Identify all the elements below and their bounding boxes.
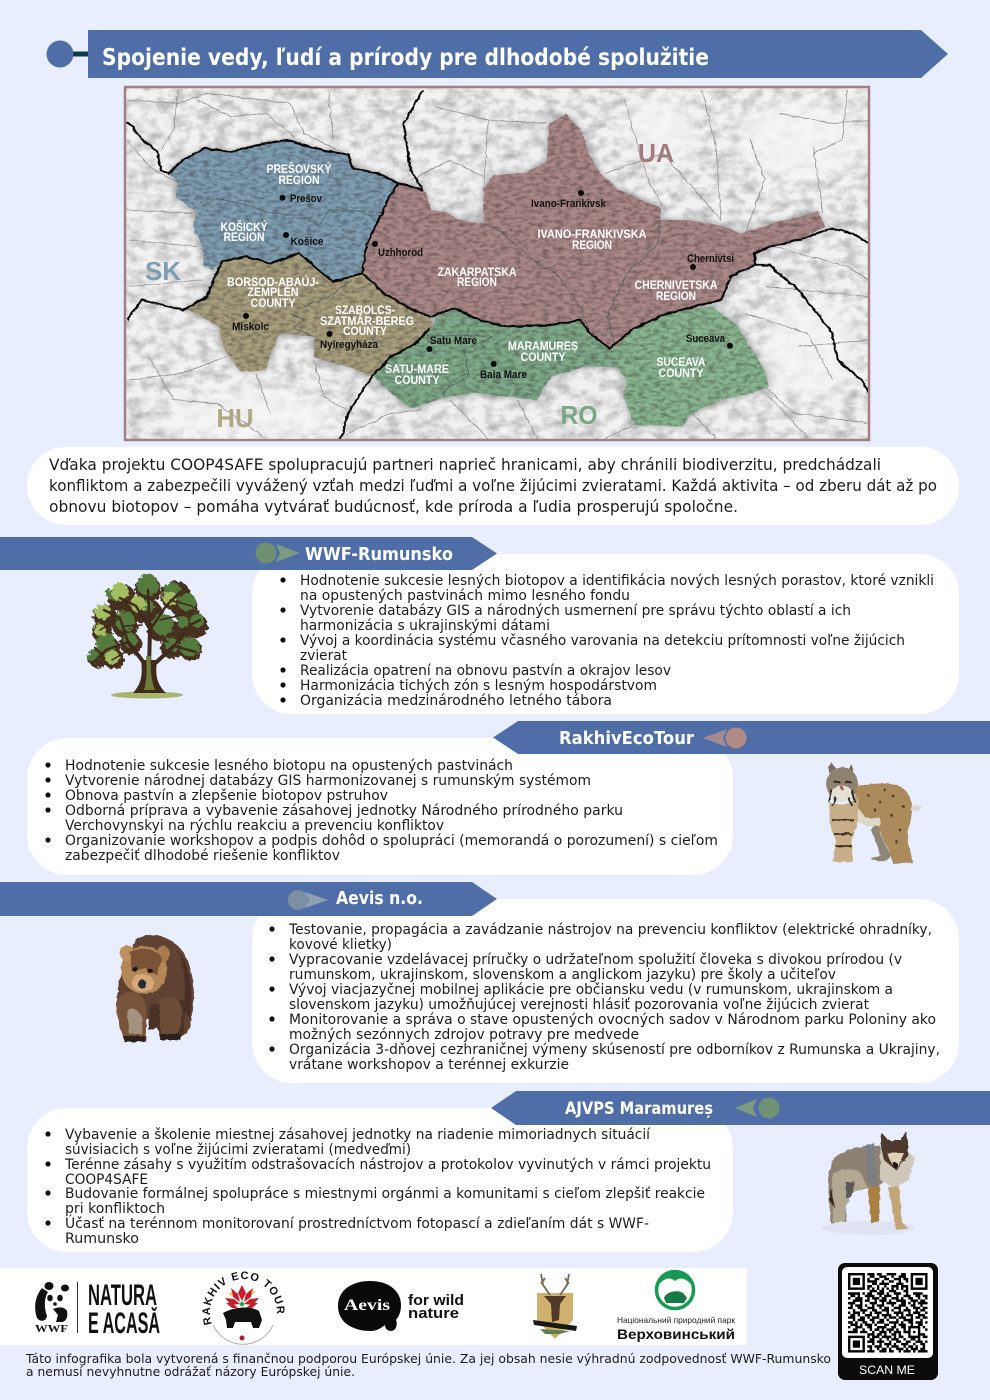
panel: AJVPS Maramureș activities (27, 1108, 733, 1252)
region labels (220, 163, 718, 387)
cities: Ivano-Frankivsk (531, 198, 607, 210)
cities: Baia Mare (480, 369, 527, 381)
icon: wolf (822, 1131, 915, 1235)
heading: WWF-Rumunsko (0, 537, 497, 570)
region labels: COUNTY (250, 298, 296, 310)
QR code with scan me label: SCAN ME (859, 1363, 915, 1377)
heading: AJVPS Maramureș: AJVPS Maramureș (565, 1099, 713, 1119)
footer disclaimer (25, 1351, 831, 1379)
title banner: Spojenie vedy, ľudí a prírody pre dlhodobé spolužitie (102, 43, 709, 71)
region labels: MARAMUREȘ (508, 341, 578, 353)
region labels: ZEMPLÉN (248, 286, 298, 299)
heading: WWF-Rumunsko: WWF-Rumunsko (305, 544, 453, 565)
region labels: ZAKARPATSKA (438, 267, 516, 279)
icon: tree (87, 574, 208, 698)
logo: Aevis for wild nature: nature (408, 1305, 459, 1322)
panel: Aevis activities: Monitorovanie a správa o stave opustených ovocných sadov v Národnom parku Poloniny ako (289, 1012, 936, 1028)
panel: WWF-Rumunsko activities: Organizácia medzinárodného letného tábora (300, 693, 612, 709)
region labels: CHERNIVETSKA (634, 280, 718, 292)
region labels: REGION (572, 240, 612, 252)
panel: RakhivEcoTour activities: Vytvorenie národnej databázy GIS harmonizovanej s rumunským systémom (65, 773, 591, 789)
panel: Aevis activities: kovové klietky) (289, 937, 392, 953)
region labels: SZABOLCS- (335, 305, 395, 317)
cities: Satu Mare (430, 335, 477, 347)
panel: AJVPS Maramureș activities: súvisiacich s voľne žijúcimi zvieratami (medveďmi) (65, 1142, 411, 1158)
region labels: REGION (656, 291, 696, 303)
Ukrainian regions (362, 113, 825, 348)
cities: Chernivtsi (687, 253, 734, 265)
panel: Aevis activities: Vývoj viacjazyčnej mobilnej aplikácie pre občiansku vedu (v rumunskom, ukrajinskom a (289, 982, 893, 998)
panel: AJVPS Maramureș activities: Budovanie formálnej spolupráce s miestnymi orgánmi a komunitami s cieľom zlepšiť reakcie (65, 1186, 705, 1202)
panel: AJVPS Maramureș activities: Účasť na terénnom monitorovaní prostredníctvom fotopascí a zdieľaním dát s WWF- (65, 1214, 649, 1232)
panel: WWF-Rumunsko activities (252, 554, 959, 714)
region labels: REGION (224, 232, 264, 244)
panel: WWF-Rumunsko activities: Hodnotenie sukcesie lesných biotopov a identifikácia nových lesných porastov, ktoré vznikli (300, 573, 934, 589)
cities (232, 190, 734, 381)
heading: RakhivEcoTour (493, 721, 990, 754)
region labels: REGION (278, 175, 320, 187)
cities: Uzhhorod (378, 247, 423, 259)
heading: Aevis n.o. (0, 882, 497, 916)
region labels: SUCEAVA (656, 357, 706, 369)
intro text panel: Vďaka projektu COOP4SAFE spolupracujú partneri naprieč hranicami, aby chránili biodiverzitu, predchádzali (49, 455, 881, 474)
logo: AJVPS deer crest (533, 1274, 577, 1339)
logo: Aevis for wild nature (338, 1281, 464, 1331)
country labels: RO (560, 400, 598, 430)
intro text panel: konfliktom a zabezpečili vyvážený vzťah medzi ľuďmi a voľne žijúcimi zvieratami. Každá aktivita – od zberu dát až po (49, 476, 937, 495)
panel: RakhivEcoTour activities: Obnova pastvín a zlepšenie biotopov pstruhov (65, 788, 388, 804)
map of the Carpathian cross-border regions (125, 87, 869, 440)
panel: RakhivEcoTour activities: Odborná príprava a vybavenie zásahovej jednotky Národného prírodného parku (65, 803, 623, 819)
panel: WWF-Rumunsko activities: Vytvorenie databázy GIS a národných usmernení pre správu týchto oblastí a ich (300, 603, 851, 619)
Slovak regions (168, 140, 399, 282)
Hungarian counties (185, 253, 433, 377)
region labels: IVANO-FRANKIVSKA (538, 229, 646, 241)
panel: AJVPS Maramureș activities: Rumunsko (65, 1231, 139, 1247)
panel: Aevis activities: Testovanie, propagácia a zavádzanie nástrojov na prevenciu konfliktov (elektrické ohradníky, (288, 922, 932, 938)
panel: WWF-Rumunsko activities: Harmonizácia tichých zón s lesným hospodárstvom (300, 678, 657, 694)
footer disclaimer: a nemusí nevyhnutne odrážať názory Európskej únie. (26, 1364, 355, 1379)
panel: WWF-Rumunsko activities: Realizácia opatrení na obnovu pastvín a okrajov lesov (300, 663, 671, 679)
heading: RakhivEcoTour: RakhivEcoTour (559, 728, 694, 749)
panel: Aevis activities (252, 899, 959, 1083)
intro text panel: obnovu biotopov – pomáha vytvárať budúcnosť, kde príroda a ľudia prosperujú spoločne. (49, 497, 738, 516)
cities: Košice (290, 236, 324, 248)
panel: AJVPS Maramureș activities: Vybavenie a školenie miestnej zásahovej jednotky na riadenie mimoriadnych situácií (65, 1127, 651, 1143)
logo: Verkhovynskyi national park: Верховинський (617, 1326, 735, 1342)
country labels: HU (216, 403, 254, 433)
region labels: REGION (457, 277, 497, 289)
country labels: SK (145, 256, 181, 286)
region labels: SATU-MARE (385, 364, 449, 376)
logo: Verkhovynskyi national park: Національний природний парк (617, 1315, 735, 1325)
region labels: COUNTY (394, 375, 440, 387)
region labels: COUNTY (343, 326, 387, 338)
cities: Nyíregyháza (320, 339, 379, 351)
logo: Aevis for wild nature: for wild (408, 1292, 464, 1309)
footer disclaimer: Táto infografika bola vytvorená s finančnou podporou Európskej únie. Za jej obsah nesie výhradnú zodpovednosť WWF-Rumunsko (25, 1351, 831, 1366)
logo: WWF Natura e acasă: WWF (35, 1323, 68, 1335)
panel: RakhivEcoTour activities: zabezpečiť dlhodobé riešenie konfliktov (65, 848, 340, 864)
panel: RakhivEcoTour activities: Verchovynskyi na rýchlu reakciu a prevenciu konfliktov (65, 818, 444, 834)
logo: WWF Natura e acasă: NATURA (88, 1279, 157, 1312)
partner logos strip (0, 1268, 747, 1345)
heading: Aevis n.o.: Aevis n.o. (336, 888, 423, 909)
panel: Aevis activities: vrátane workshopov a terénnej exkurzie (289, 1057, 569, 1073)
panel: RakhivEcoTour activities (27, 738, 733, 875)
region labels: KOŠICKÝ (220, 221, 268, 234)
panel: RakhivEcoTour activities: Organizovanie workshopov a podpis dohôd o spolupráci (memorandá o porozumení) s cieľom (65, 833, 718, 849)
panel: Aevis activities: možných sezónnych zdrojov potravy pre medvede (289, 1027, 639, 1043)
logo: Verkhovynskyi national park (617, 1271, 735, 1342)
panel: WWF-Rumunsko activities: na opustených pastvinách mimo lesného fondu (300, 588, 630, 604)
logo: WWF Natura e acasă: E ACASĂ (88, 1306, 160, 1340)
panel: WWF-Rumunsko activities: Vývoj a koordinácia systému včasného varovania na detekciu prítomnosti voľne žijúcich (300, 633, 905, 649)
Suceava county (610, 307, 769, 427)
panel: Aevis activities: Vypracovanie vzdelávacej príručky o udržateľnom spolužití človeka s divokou prírodou (v (289, 952, 902, 968)
logo: WWF Natura e acasă (35, 1279, 160, 1340)
panel: WWF-Rumunsko activities: harmonizácia s ukrajinskými dátami (300, 618, 550, 634)
region labels: SZATMÁR-BEREG (320, 315, 414, 328)
cities: Miskolc (232, 321, 269, 333)
cities: Prešov (290, 193, 323, 205)
intro text panel (27, 447, 959, 525)
region labels: PREŠOVSKÝ (266, 163, 332, 176)
panel: RakhivEcoTour activities: Hodnotenie sukcesie lesného biotopu na opustených pastvinách (65, 758, 513, 774)
country labels: UA (638, 138, 674, 168)
panel: WWF-Rumunsko activities: zvierat (300, 648, 347, 664)
region labels: COUNTY (658, 368, 704, 380)
panel: Aevis activities: rumunskom, ukrajinskom, slovenskom a anglickom jazyku) pre školy a učiteľov (289, 967, 836, 983)
panel: AJVPS Maramureș activities: Terénne zásahy s využitím odstrašovacích nástrojov a protokolov vyvinutých v rámci projektu (64, 1157, 711, 1173)
icon: lynx (826, 762, 921, 864)
panel: AJVPS Maramureș activities: COOP4SAFE (65, 1172, 148, 1188)
Romanian counties (372, 308, 624, 408)
cities: Suceava (686, 333, 726, 345)
region labels: COUNTY (520, 352, 566, 364)
QR code with scan me label (838, 1263, 938, 1380)
logo: Rakhiv Eco Tour: RAKHIV ECO TOUR (202, 1272, 284, 1326)
panel: AJVPS Maramureș activities: pri konfliktoch (65, 1201, 165, 1217)
region labels: BORSOD-ABAÚJ- (227, 276, 319, 289)
heading: AJVPS Maramureș (491, 1091, 990, 1125)
title banner (46, 30, 948, 78)
panel: Aevis activities: Organizácia 3-dňovej cezhraničnej výmeny skúseností pre odborníkov z Rumunska a Ukrajiny, (289, 1042, 940, 1058)
icon: brown bear (117, 935, 194, 1042)
logo: Aevis for wild nature: Aevis (344, 1297, 390, 1314)
panel: Aevis activities: slovenskom jazyku) umožňujúcej verejnosti hlásiť pozorovania voľne žijúcich zvierat (289, 997, 869, 1013)
country labels (145, 138, 674, 433)
